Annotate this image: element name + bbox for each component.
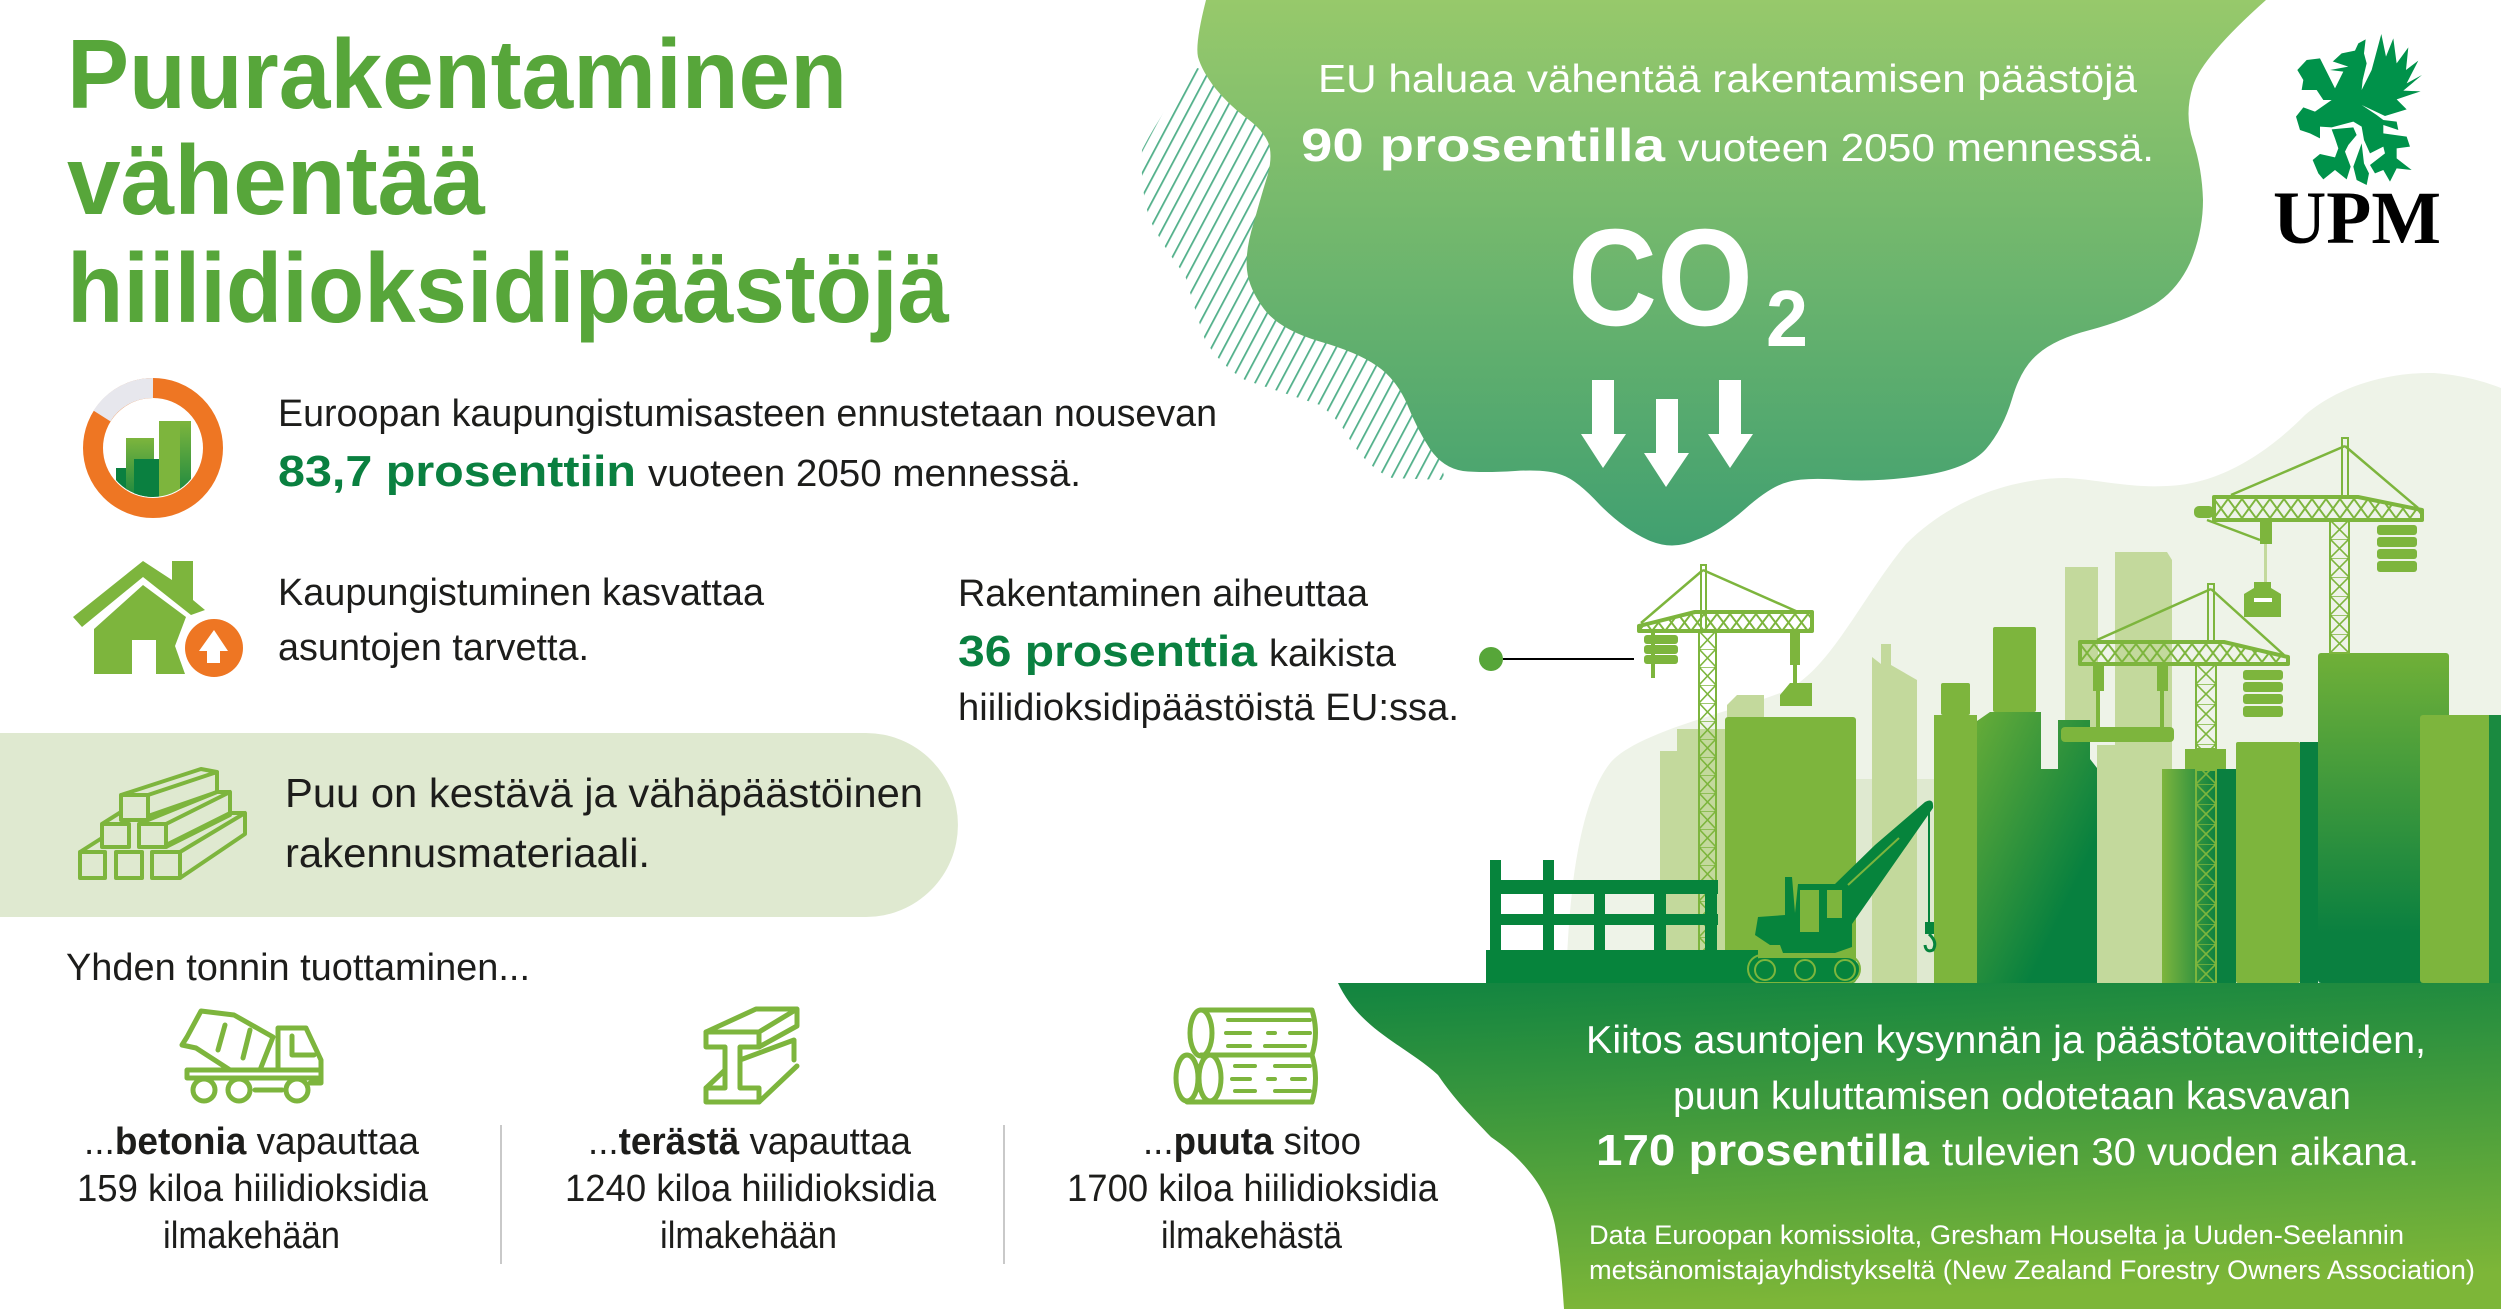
panel: wood consumption forecast (1338, 983, 2501, 1309)
hatched shadow behind CO2 cloud (1142, 68, 1445, 480)
icon: urbanisation donut chart (93, 388, 213, 509)
column: steel (565, 1121, 937, 1257)
text: housing need: Kaupungistuminen kasvattaa (278, 572, 765, 614)
text: housing need (278, 572, 765, 669)
column: concrete: 159 kiloa hiilidioksidia (77, 1168, 429, 1210)
column: wood: ...puuta sitoo (1143, 1121, 1361, 1163)
heading: producing one tonne: Yhden tonnin tuottaminen... (66, 947, 530, 989)
text: construction emissions: 36 prosenttia (958, 627, 1258, 676)
column: wood: ilmakehästä (1161, 1215, 1343, 1257)
pale background buildings (1660, 552, 2172, 983)
column: wood: 1700 kiloa hiilidioksidia (1067, 1168, 1439, 1210)
text: urbanisation forecast: vuoteen 2050 mennessä. (648, 453, 1081, 495)
panel: EU target cloud: vuoteen 2050 mennessä. (1678, 127, 2154, 170)
column: concrete (77, 1121, 429, 1257)
mid and dark green buildings (1725, 627, 2501, 983)
column: steel: ...terästä vapauttaa (588, 1121, 912, 1163)
text: construction emissions (958, 573, 1459, 729)
icon: stacked logs (1176, 1010, 1316, 1102)
column: concrete: ilmakehään (163, 1215, 340, 1257)
crawler crane (1748, 800, 1935, 984)
panel: wood consumption forecast: metsänomistajayhdistykseltä (New Zealand Forestry Owners Association) (1589, 1255, 2475, 1285)
panel: EU target cloud: 90 prosentilla (1301, 119, 1665, 171)
panel: EU target cloud: 2 (1766, 274, 1808, 363)
icon: steel I-beam (706, 1009, 797, 1102)
icon: stacked timber (80, 769, 245, 878)
building frame under construction (1486, 860, 1758, 983)
icon: house with up arrow (73, 561, 250, 684)
panel: wood consumption forecast: Data Euroopan komissiolta, Gresham Houselta ja Uuden-Seelannin (1589, 1220, 2404, 1250)
crane: top right (2194, 438, 2422, 653)
title (67, 19, 949, 343)
column: concrete: ...betonia vapauttaa (84, 1121, 420, 1163)
panel: wood is durable: rakennusmateriaali. (285, 830, 650, 876)
text: urbanisation forecast (278, 393, 1217, 496)
crane: left (1639, 565, 1812, 951)
panel: wood consumption forecast: puun kuluttamisen odotetaan kasvavan (1673, 1075, 2351, 1118)
illustration: city under construction (1486, 438, 2501, 984)
column: steel: ilmakehään (660, 1215, 837, 1257)
panel: EU target cloud (1197, 0, 2266, 546)
title: vähentää (67, 125, 485, 235)
text: construction emissions: hiilidioksidipäästöistä EU:ssa. (958, 687, 1459, 729)
panel: EU target cloud: CO (1568, 201, 1753, 355)
panel: wood consumption forecast: tulevien 30 vuoden aikana. (1942, 1131, 2419, 1174)
column: wood (1067, 1121, 1439, 1257)
logo: UPM griffin (2273, 34, 2441, 260)
text: urbanisation forecast: 83,7 prosenttiin (278, 447, 636, 496)
text: construction emissions: kaikista (1269, 633, 1397, 675)
title: hiilidioksidipäästöjä (67, 233, 949, 343)
panel: wood consumption forecast: Kiitos asuntojen kysynnän ja päästötavoitteiden, (1586, 1019, 2426, 1062)
panel: wood consumption forecast: 170 prosentilla (1596, 1126, 1930, 1175)
panel: wood is durable (0, 733, 958, 917)
text: housing need: asuntojen tarvetta. (278, 627, 589, 669)
crane: middle right (2061, 584, 2288, 983)
panel: EU target cloud: EU haluaa vähentää rakentamisen päästöjä (1318, 58, 2137, 101)
logo: UPM griffin: UPM (2273, 177, 2441, 260)
panel: wood is durable: Puu on kestävä ja vähäpäästöinen (285, 770, 923, 816)
background: pale green hill behind city (1566, 373, 2501, 990)
text: construction emissions: Rakentaminen aiheuttaa (958, 573, 1369, 615)
icon: concrete mixer truck (182, 1011, 321, 1101)
icon: three down arrows (1581, 380, 1753, 487)
title: Puurakentaminen (67, 19, 847, 129)
text: urbanisation forecast: Euroopan kaupungistumisasteen ennustetaan nousevan (278, 393, 1217, 435)
column: steel: 1240 kiloa hiilidioksidia (565, 1168, 937, 1210)
callout line to crane (1479, 647, 1634, 671)
